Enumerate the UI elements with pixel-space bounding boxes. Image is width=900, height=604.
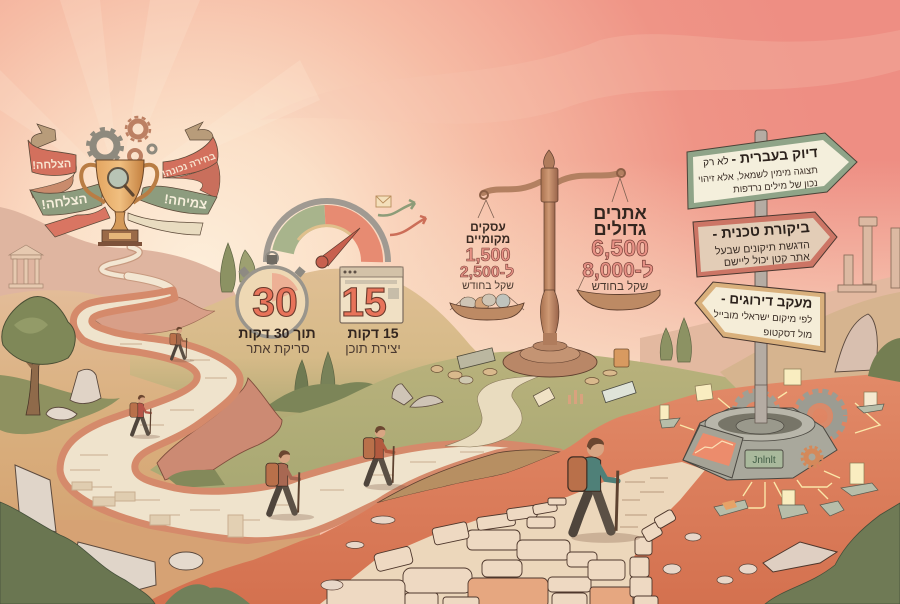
broken column [15, 465, 56, 532]
horizon glow [400, 160, 900, 380]
right text: אתרים [593, 203, 647, 223]
trophy with ribbons: הצלחה! [41, 191, 88, 212]
stopwatch label: סריקת אתר [246, 341, 310, 356]
trophy with ribbons: צמיחה! [163, 191, 208, 212]
far right hillside [720, 292, 900, 392]
small stones [321, 516, 757, 590]
cobble marks [70, 344, 484, 537]
hiker centre [363, 426, 407, 490]
cup body [96, 160, 144, 212]
green display [745, 450, 783, 468]
inner tan arc [298, 226, 352, 240]
envelope [376, 196, 391, 207]
beam [483, 172, 622, 193]
machine body [683, 408, 837, 480]
right text: גדולים [594, 219, 647, 239]
sign: Hebrew accuracy: תצוגה מימין לשמאל, אלא זיהוי [698, 164, 818, 185]
left ground [0, 290, 320, 604]
ribbon right green [140, 186, 217, 214]
rock right hillside [835, 314, 877, 372]
ribbon fold left [30, 165, 77, 198]
left temple ruin [9, 245, 43, 288]
cypress trees [220, 243, 692, 402]
gear machine [683, 385, 845, 480]
coins and papers around scale [431, 348, 636, 407]
sign: Hebrew accuracy: נכון של מילים נרדפות [733, 177, 818, 196]
browser label: 15 דקות [347, 325, 399, 341]
trophy glow rays [0, 0, 320, 190]
gauge ring [266, 201, 388, 262]
bush bottom centre [165, 584, 250, 604]
signpost pole [755, 130, 767, 420]
ribbon left green [30, 183, 102, 215]
magnifier [108, 168, 128, 188]
left chains [450, 200, 524, 310]
dark shrub band [262, 382, 392, 415]
hiker left [130, 395, 160, 439]
browser label [345, 325, 401, 356]
sign: technical audit [693, 212, 837, 277]
ribbon right red [163, 137, 218, 178]
right text: 6,500 [591, 235, 649, 261]
bush bottom left [0, 502, 155, 604]
base [503, 347, 597, 377]
ribbon text: הצלחה! [32, 157, 72, 172]
gear machine: Jnlnlt [752, 455, 776, 466]
dark bush in bend [168, 470, 225, 488]
stopwatch label [238, 325, 316, 356]
boulders central hill [392, 384, 443, 407]
brown mound [377, 450, 560, 503]
small orange gear [802, 447, 822, 467]
ruin columns right [838, 217, 900, 292]
tan foreground ground [0, 520, 320, 604]
sign: rank tracking [695, 282, 825, 352]
gears above trophy [88, 117, 156, 163]
sign: Hebrew accuracy: דיוק בעברית - לא רק [702, 144, 818, 169]
sign: technical audit: ביקורת טכנית - [712, 220, 810, 243]
sign: Hebrew accuracy [687, 133, 857, 209]
browser window [340, 267, 403, 325]
small boulder [169, 552, 203, 570]
cup base [102, 230, 138, 242]
left pan [450, 303, 524, 320]
bush bottom right [765, 503, 900, 604]
trophy with ribbons: בחירה נכונה! [161, 151, 217, 180]
foreground cobblestone road [320, 462, 705, 604]
number 15: 15 [341, 279, 387, 325]
fallen column [74, 542, 156, 592]
cup handles [81, 165, 105, 203]
right text [582, 203, 654, 293]
hiker foreground [568, 438, 640, 543]
left text: מקומיים [466, 232, 510, 246]
pole [544, 200, 555, 295]
ribbon fold right [165, 162, 220, 198]
sign: rank tracking: מעקב דירוגים - [721, 291, 813, 311]
right text: ל-8,000 [582, 259, 654, 282]
hiker far [170, 327, 194, 362]
sky cloud streaks [260, 30, 900, 124]
gauge red arc [325, 216, 372, 262]
left text: שקל בחודש [462, 280, 514, 292]
right text: שקל בחודש [592, 280, 648, 293]
tree [2, 297, 75, 415]
number 30: 30 [252, 279, 298, 325]
standing rock [70, 369, 101, 404]
distant hills right [640, 275, 900, 400]
distant hills left [0, 207, 260, 340]
left text: עסקים [470, 220, 506, 234]
cup stem [109, 212, 130, 232]
right pan [577, 290, 660, 310]
balance scale [450, 150, 660, 377]
left text: 1,500 [465, 245, 511, 265]
trophy with ribbons [28, 117, 220, 246]
machine pole overlay [755, 385, 767, 423]
gauge green arc [283, 216, 325, 252]
terracotta cliff [157, 378, 282, 480]
right chains [578, 178, 628, 290]
sign: technical audit: הדגשת תיקונים שבעל [715, 239, 810, 258]
growth arrows [378, 200, 426, 235]
ribbon tails [31, 124, 56, 150]
stopwatch label: תוך 30 דקות [238, 325, 316, 341]
stopwatch [237, 252, 307, 337]
left text: ל-2,500 [460, 263, 514, 281]
road branch to scales [445, 376, 540, 447]
browser label: יצירת תוכן [345, 341, 401, 356]
bush right [868, 338, 900, 382]
small rock [46, 407, 77, 420]
winding road upper [102, 247, 173, 297]
sign: technical audit: אתר קטן יכול ליישם [723, 251, 811, 269]
rear gear left [734, 391, 778, 435]
rear gear right [795, 391, 845, 441]
sign: rank tracking: לפי מיקום ישראלי מובייל [713, 308, 813, 326]
ribbon left red [28, 140, 76, 175]
speed gauge [266, 196, 426, 268]
needle [320, 228, 360, 266]
chart screen panel [683, 425, 743, 478]
foreground rock right [763, 542, 837, 572]
left stones [460, 294, 510, 311]
hiker path bend [266, 450, 314, 521]
sign: rank tracking: מול דסקטופ [763, 326, 813, 341]
terracotta canyon upper [93, 297, 215, 334]
winding road main [60, 290, 560, 541]
shrubs by tree [0, 375, 120, 434]
central hill [150, 351, 750, 495]
terracotta foreground ground [143, 372, 900, 604]
left text [460, 220, 514, 292]
mid hill behind stopwatch [130, 269, 535, 430]
glowing documents and circuit [660, 369, 884, 519]
